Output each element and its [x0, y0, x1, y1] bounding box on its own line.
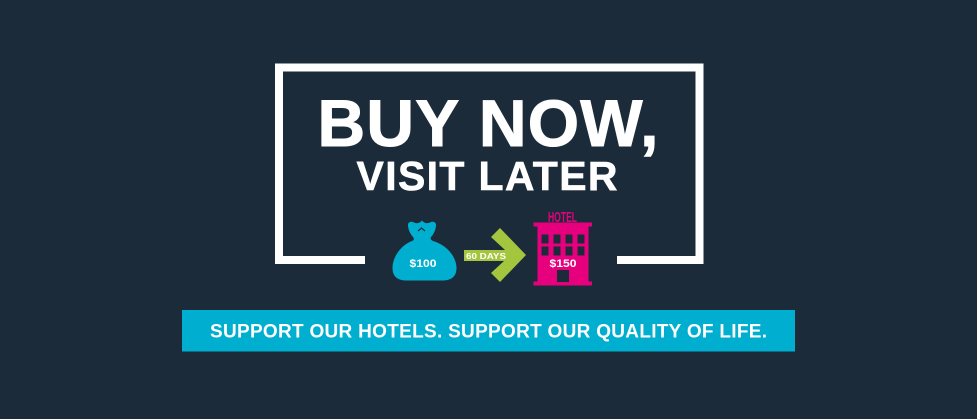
hotel sign: HOTEL: [548, 210, 577, 226]
icon: hotel building: [534, 210, 592, 286]
arrow: 60 days: [464, 228, 526, 282]
label: $100: $100: [410, 258, 436, 270]
subtitle: visit later: VISIT LATER: [356, 153, 618, 199]
label: $150: $150: [550, 258, 576, 270]
frame around headline: [279, 68, 700, 260]
title: buy now: BUY NOW,: [318, 86, 658, 160]
windows: [542, 234, 584, 282]
icon: money bag: [392, 220, 456, 280]
label: 60 days: 60 DAYS: [466, 251, 506, 261]
banner text: SUPPORT OUR HOTELS. SUPPORT OUR QUALITY OF LIFE.: [210, 322, 767, 342]
banner: [182, 310, 795, 352]
